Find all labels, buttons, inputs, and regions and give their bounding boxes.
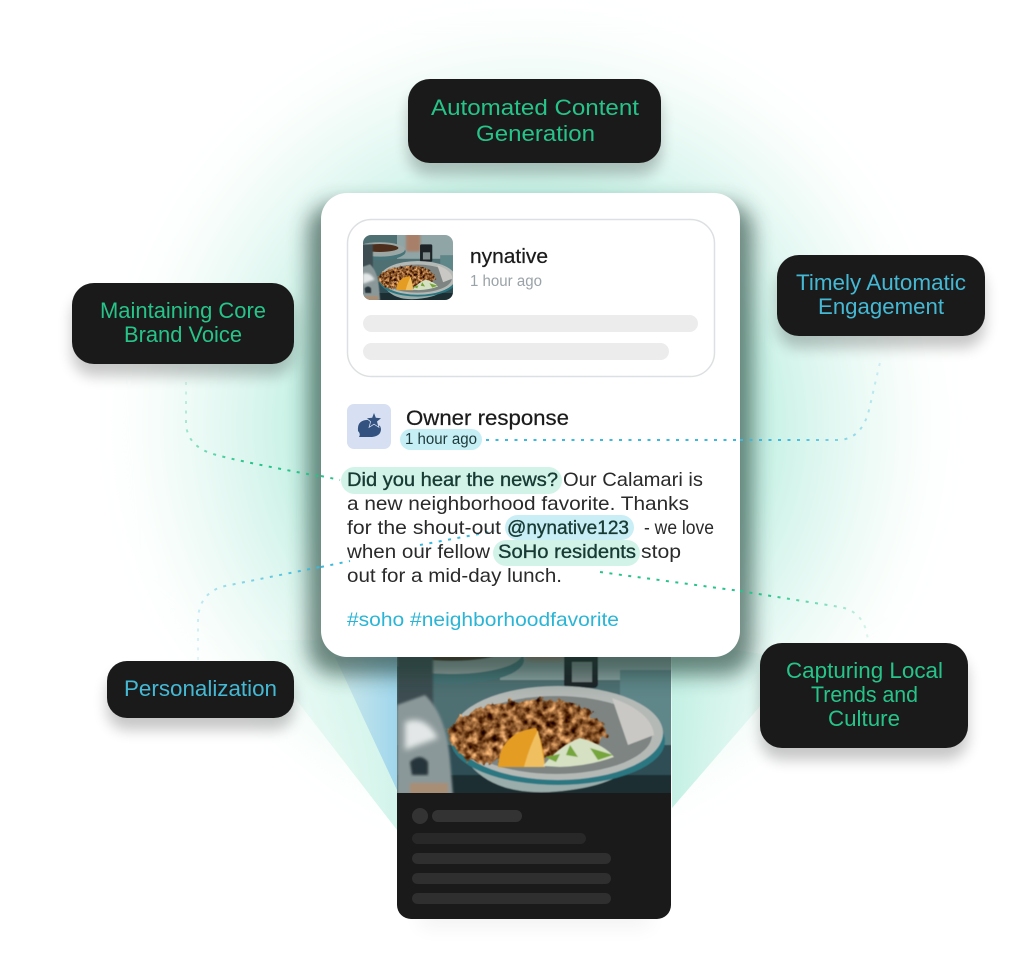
card: dark post preview with photo <box>397 657 671 919</box>
callout: automated content generation: Generation <box>476 121 595 146</box>
post text placeholders <box>412 833 611 904</box>
post time: 1 hour ago <box>470 273 542 290</box>
response text with highlights <box>341 467 714 587</box>
callout: automated content generation <box>408 79 661 175</box>
original post box <box>347 220 714 376</box>
callout: automated content generation: Automated Content <box>431 95 640 120</box>
callout: maintaining core brand voice: Brand Voice <box>124 322 242 347</box>
main white card <box>321 193 740 657</box>
response text with highlights: Did you hear the news? <box>347 469 558 491</box>
callout: timely automatic engagement: Engagement <box>818 294 945 319</box>
placeholder bar 2 <box>363 343 669 360</box>
callout: timely automatic engagement <box>777 255 985 348</box>
hashtags: #soho #neighborhoodfavorite <box>347 609 619 631</box>
response text with highlights: stop <box>641 541 681 563</box>
post name placeholder <box>432 810 522 822</box>
response text with highlights: when our fellow <box>346 541 491 563</box>
response text with highlights: @nynative123 <box>507 517 629 539</box>
post avatar placeholder <box>412 808 428 824</box>
response text with highlights: SoHo residents <box>498 541 636 563</box>
icon: owner response bubble with star <box>347 404 391 449</box>
connector lines outside card <box>186 358 881 660</box>
callout: capturing local trends and culture <box>760 643 968 760</box>
food photo <box>397 657 671 793</box>
highlighted timestamp: 1 hour ago <box>405 431 477 448</box>
poster name: nynative <box>470 246 548 268</box>
response text with highlights: a new neighborhood favorite. Thanks <box>347 493 689 515</box>
main card shadow <box>308 203 753 675</box>
callout: maintaining core brand voice: Maintaining Core <box>100 298 266 323</box>
callout: personalization: Personalization <box>124 676 277 701</box>
callout: capturing local trends and culture: Capturing Local <box>786 658 943 683</box>
response text with highlights: for the shout-out <box>347 517 502 539</box>
callout: personalization <box>107 661 294 730</box>
heading: owner response: Owner response <box>406 406 569 430</box>
response text with highlights: - we love <box>644 517 714 539</box>
connector lines over card <box>321 440 740 591</box>
thumbnail photo <box>363 235 453 300</box>
callout: maintaining core brand voice <box>72 283 294 376</box>
placeholder bar 1 <box>363 315 698 332</box>
callout: capturing local trends and culture: Culture <box>828 706 900 731</box>
callout: timely automatic engagement: Timely Automatic <box>796 270 966 295</box>
response text with highlights: Our Calamari is <box>563 469 703 491</box>
callout: capturing local trends and culture: Trends and <box>811 682 918 707</box>
response text with highlights: out for a mid-day lunch. <box>347 565 562 587</box>
